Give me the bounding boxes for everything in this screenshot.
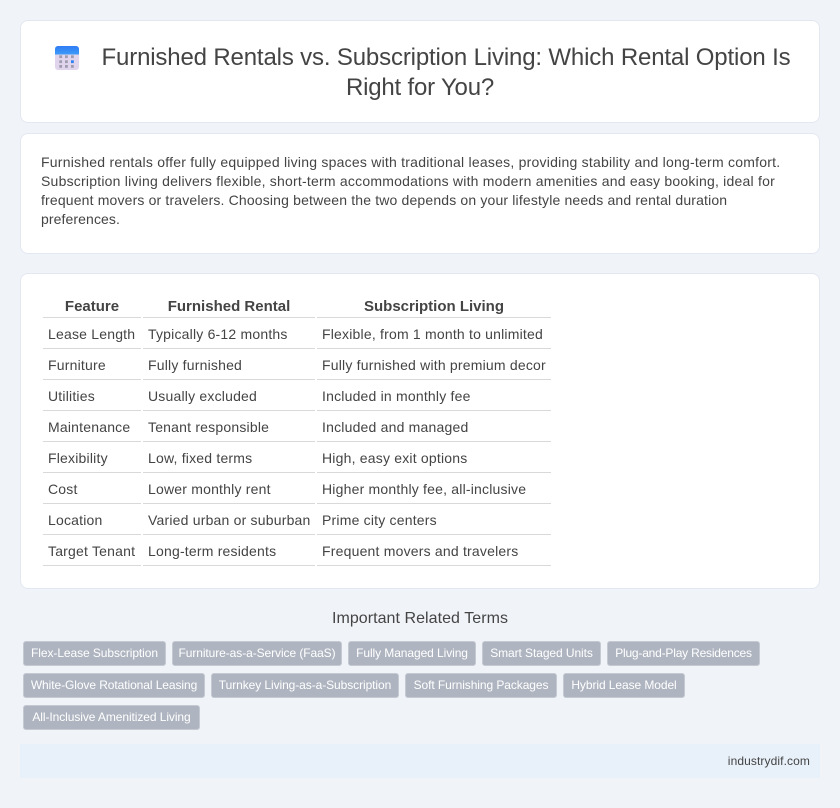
row: location bbox=[48, 512, 437, 528]
tag bbox=[172, 641, 342, 666]
row: flexibility: Low, fixed terms bbox=[148, 450, 252, 466]
row: location: Varied urban or suburban bbox=[148, 512, 311, 528]
panel: comparison table bbox=[20, 273, 820, 589]
row: maintenance: Tenant responsible bbox=[148, 419, 269, 435]
intro text: Furnished rentals offer fully equipped living spaces with traditional leases, providing stability and long-term comfort. bbox=[41, 154, 780, 170]
tag: White-Glove Rotational Leasing bbox=[31, 678, 197, 692]
tag bbox=[211, 673, 399, 698]
intro text: Subscription living delivers flexible, short-term accommodations with modern amenities and easy booking, ideal for bbox=[41, 173, 775, 189]
row: furniture: Fully furnished with premium decor bbox=[322, 357, 546, 373]
row: target tenant bbox=[48, 543, 518, 559]
panel: title header bbox=[20, 20, 820, 123]
row: furniture: Fully furnished bbox=[148, 357, 242, 373]
row: lease length: Flexible, from 1 month to unlimited bbox=[322, 326, 543, 342]
intro text bbox=[41, 154, 780, 227]
row: maintenance bbox=[48, 419, 468, 435]
row: flexibility: Flexibility bbox=[48, 450, 108, 466]
row: cost: Higher monthly fee, all-inclusive bbox=[322, 481, 526, 497]
row: lease length: Typically 6-12 months bbox=[148, 326, 288, 342]
footer bar bbox=[20, 744, 820, 778]
tag bbox=[23, 673, 205, 698]
row: location: Prime city centers bbox=[322, 512, 437, 528]
tag: Soft Furnishing Packages bbox=[414, 678, 548, 692]
footer domain: industrydif.com bbox=[728, 754, 810, 768]
row: furniture: Furniture bbox=[48, 357, 106, 373]
tag: Furniture-as-a-Service (FaaS) bbox=[178, 646, 336, 660]
row: target tenant: Long-term residents bbox=[148, 543, 276, 559]
row: utilities bbox=[48, 388, 471, 404]
row: flexibility: High, easy exit options bbox=[322, 450, 467, 466]
row: cost bbox=[48, 481, 526, 497]
icon: calendar bbox=[55, 46, 79, 70]
intro text: frequent movers or travelers. Choosing between the two depends on your lifestyle needs and rental duration bbox=[41, 192, 727, 208]
tag: Smart Staged Units bbox=[490, 646, 593, 660]
table header: Feature bbox=[65, 298, 119, 315]
row: furniture bbox=[48, 357, 546, 373]
tag: Plug-and-Play Residences bbox=[615, 646, 752, 660]
row: cost: Lower monthly rent bbox=[148, 481, 271, 497]
row: location: Location bbox=[48, 512, 103, 528]
tag: All-Inclusive Amenitized Living bbox=[32, 710, 191, 724]
tag bbox=[607, 641, 760, 666]
row: cost: Cost bbox=[48, 481, 78, 497]
intro text: preferences. bbox=[41, 211, 120, 227]
row: target tenant: Frequent movers and travelers bbox=[322, 543, 518, 559]
title bbox=[102, 44, 790, 101]
tag: Hybrid Lease Model bbox=[571, 678, 677, 692]
heading: important related terms: Important Related Terms bbox=[332, 610, 508, 627]
row: utilities: Included in monthly fee bbox=[322, 388, 471, 404]
tag: Turnkey Living-as-a-Subscription bbox=[219, 678, 391, 692]
row: lease length bbox=[48, 326, 543, 342]
row: maintenance: Included and managed bbox=[322, 419, 468, 435]
row: lease length: Lease Length bbox=[48, 326, 135, 342]
tag bbox=[23, 641, 166, 666]
tag: Flex-Lease Subscription bbox=[31, 646, 158, 660]
panel: introduction bbox=[20, 133, 820, 254]
row: utilities: Utilities bbox=[48, 388, 95, 404]
table header bbox=[65, 298, 504, 315]
title: Furnished Rentals vs. Subscription Living: Which Rental Option Is bbox=[102, 44, 790, 71]
comparison table bbox=[43, 298, 551, 566]
title: Right for You? bbox=[346, 74, 494, 101]
tag bbox=[563, 673, 685, 698]
row: flexibility bbox=[48, 450, 467, 466]
row: maintenance: Maintenance bbox=[48, 419, 130, 435]
tag bbox=[348, 641, 476, 666]
table header: Furnished Rental bbox=[168, 298, 290, 315]
row: target tenant: Target Tenant bbox=[48, 543, 135, 559]
row: utilities: Usually excluded bbox=[148, 388, 257, 404]
tag: Fully Managed Living bbox=[356, 646, 468, 660]
tag bbox=[482, 641, 601, 666]
table header: Subscription Living bbox=[364, 298, 504, 315]
tag bbox=[405, 673, 557, 698]
related term tags bbox=[23, 641, 760, 730]
tag bbox=[23, 705, 200, 730]
